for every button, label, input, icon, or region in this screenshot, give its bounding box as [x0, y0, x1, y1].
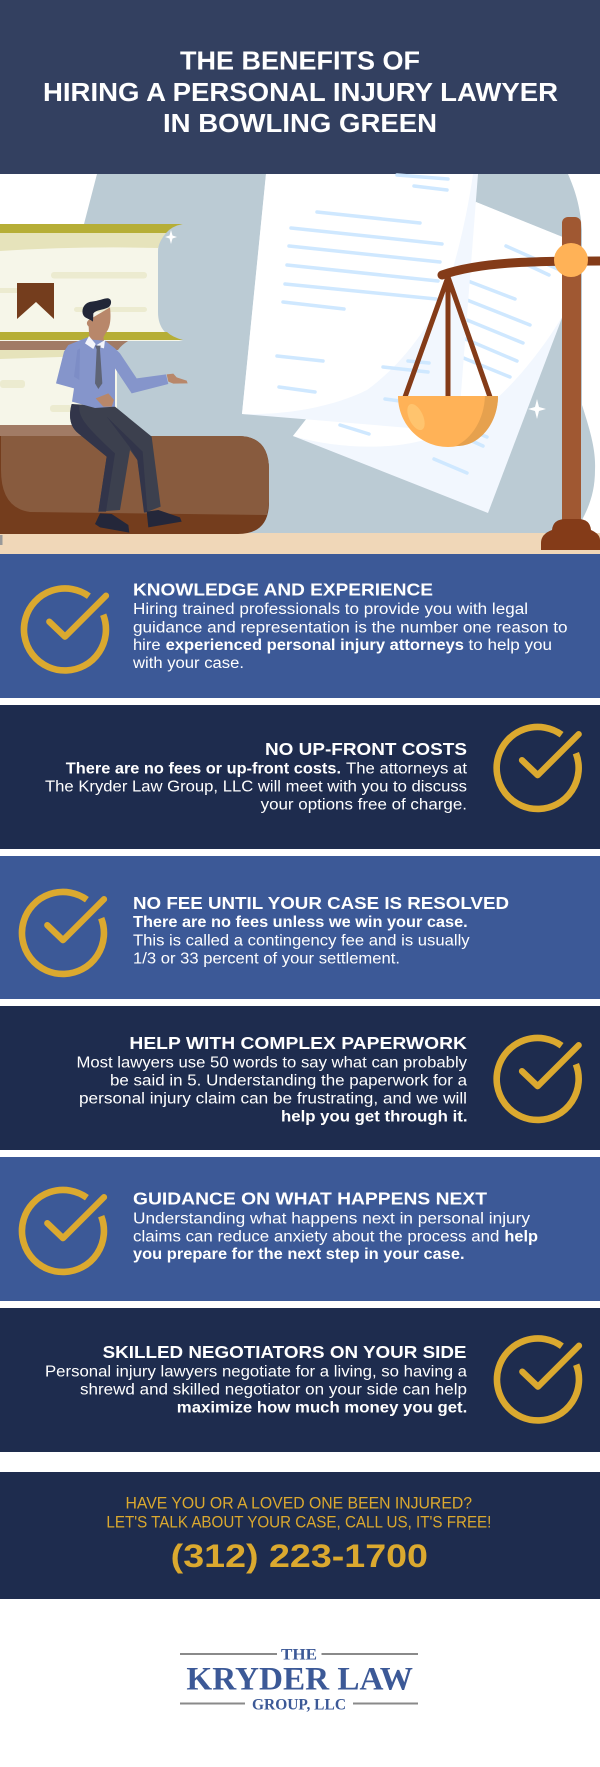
body text: The Kryder Law Group, LLC will meet with you to discuss — [45, 778, 467, 795]
body text: The attorneys at — [346, 760, 468, 777]
body text — [132, 601, 568, 672]
call to action text: HAVE YOU OR A LOVED ONE BEEN INJURED? — [126, 1495, 472, 1513]
logo: The Kryder Law Group: THE — [281, 1647, 317, 1664]
body text: Understanding what happens next in personal injury — [133, 1210, 530, 1227]
body text: There are no fees or up-front costs. — [66, 760, 341, 777]
body text — [133, 914, 470, 967]
title — [43, 48, 558, 138]
panel: guidance on what happens next — [0, 1157, 600, 1301]
body text: to help you — [468, 637, 552, 654]
body text — [45, 1363, 467, 1416]
header banner — [0, 0, 600, 174]
body text: hire — [133, 637, 160, 654]
body text — [76, 1054, 468, 1125]
scales of justice — [398, 217, 600, 550]
phone number: (312) 223-1700 — [171, 1538, 428, 1574]
base — [541, 519, 600, 550]
body text: be said in 5. Understanding the paperwork for a — [110, 1072, 467, 1089]
front paper — [242, 174, 478, 432]
icon: check circle — [22, 1190, 104, 1272]
strings — [405, 277, 490, 397]
icon: check circle — [24, 588, 106, 670]
body text: This is called a contingency fee and is usually — [133, 932, 470, 949]
icon: check circle — [497, 727, 579, 809]
body text — [45, 760, 468, 813]
body text: with your case. — [132, 655, 244, 672]
heading: SKILLED NEGOTIATORS ON YOUR SIDE — [103, 1342, 467, 1362]
heading: HELP WITH COMPLEX PAPERWORK — [129, 1033, 467, 1053]
title: HIRING A PERSONAL INJURY LAWYER — [43, 79, 558, 107]
call to action text — [106, 1495, 491, 1532]
body text: 1/3 or 33 percent of your settlement. — [133, 950, 400, 967]
body text: help you get through it. — [281, 1108, 468, 1125]
top book — [0, 224, 183, 341]
sparkles — [165, 230, 546, 419]
icon: check circle — [497, 1338, 579, 1420]
panel: skilled negotiators — [0, 1308, 600, 1452]
pan — [398, 396, 498, 447]
body text — [133, 1210, 538, 1263]
pivot — [554, 243, 588, 277]
heading: KNOWLEDGE AND EXPERIENCE — [133, 580, 433, 600]
title: THE BENEFITS OF — [180, 48, 420, 76]
illustration: lawyer with books and scales — [0, 174, 600, 554]
logo: The Kryder Law Group: GROUP, LLC — [252, 1696, 346, 1713]
body text: shrewd and skilled negotiator on your side can help — [80, 1381, 467, 1398]
logo: The Kryder Law Group — [180, 1647, 418, 1713]
background blob — [0, 174, 595, 533]
icon: bookmark — [17, 283, 54, 319]
panel: no up-front costs — [0, 705, 600, 849]
post — [562, 217, 581, 527]
call to action text: LET'S TALK ABOUT YOUR CASE, CALL US, IT'S FREE! — [106, 1514, 491, 1532]
heading: GUIDANCE ON WHAT HAPPENS NEXT — [133, 1189, 487, 1209]
panel: call to action — [0, 1472, 600, 1599]
body text: Personal injury lawyers negotiate for a living, so having a — [45, 1363, 467, 1380]
body text: help — [504, 1228, 538, 1245]
icon: check circle — [497, 1038, 579, 1120]
body text: maximize how much money you get. — [177, 1399, 467, 1416]
beam — [442, 261, 600, 275]
middle book — [0, 340, 130, 436]
body text: personal injury claim can be frustrating, and we will — [79, 1090, 467, 1107]
logo: The Kryder Law Group: KRYDER LAW — [186, 1661, 413, 1697]
heading: NO FEE UNTIL YOUR CASE IS RESOLVED — [133, 893, 509, 913]
body text: experienced personal injury attorneys — [166, 637, 464, 654]
back paper — [293, 202, 565, 513]
body text: claims can reduce anxiety about the process and — [133, 1228, 499, 1245]
body text: Most lawyers use 50 words to say what can probably — [76, 1054, 467, 1071]
body text: There are no fees unless we win your case. — [133, 914, 468, 931]
icon: check circle — [22, 892, 104, 974]
body text: your options free of charge. — [261, 796, 467, 813]
man sitting on books — [56, 298, 188, 533]
body text: guidance and representation is the number one reason to — [133, 619, 568, 636]
bottom brown book — [0, 436, 269, 545]
ground — [0, 533, 600, 554]
panel: help with complex paperwork — [0, 1006, 600, 1150]
panel: no fee until resolved — [0, 856, 600, 999]
body text: Hiring trained professionals to provide you with legal — [133, 601, 528, 618]
heading: NO UP-FRONT COSTS — [265, 739, 467, 759]
title: IN BOWLING GREEN — [163, 110, 437, 138]
body text: you prepare for the next step in your case. — [133, 1246, 465, 1263]
panel: knowledge and experience — [0, 554, 600, 698]
